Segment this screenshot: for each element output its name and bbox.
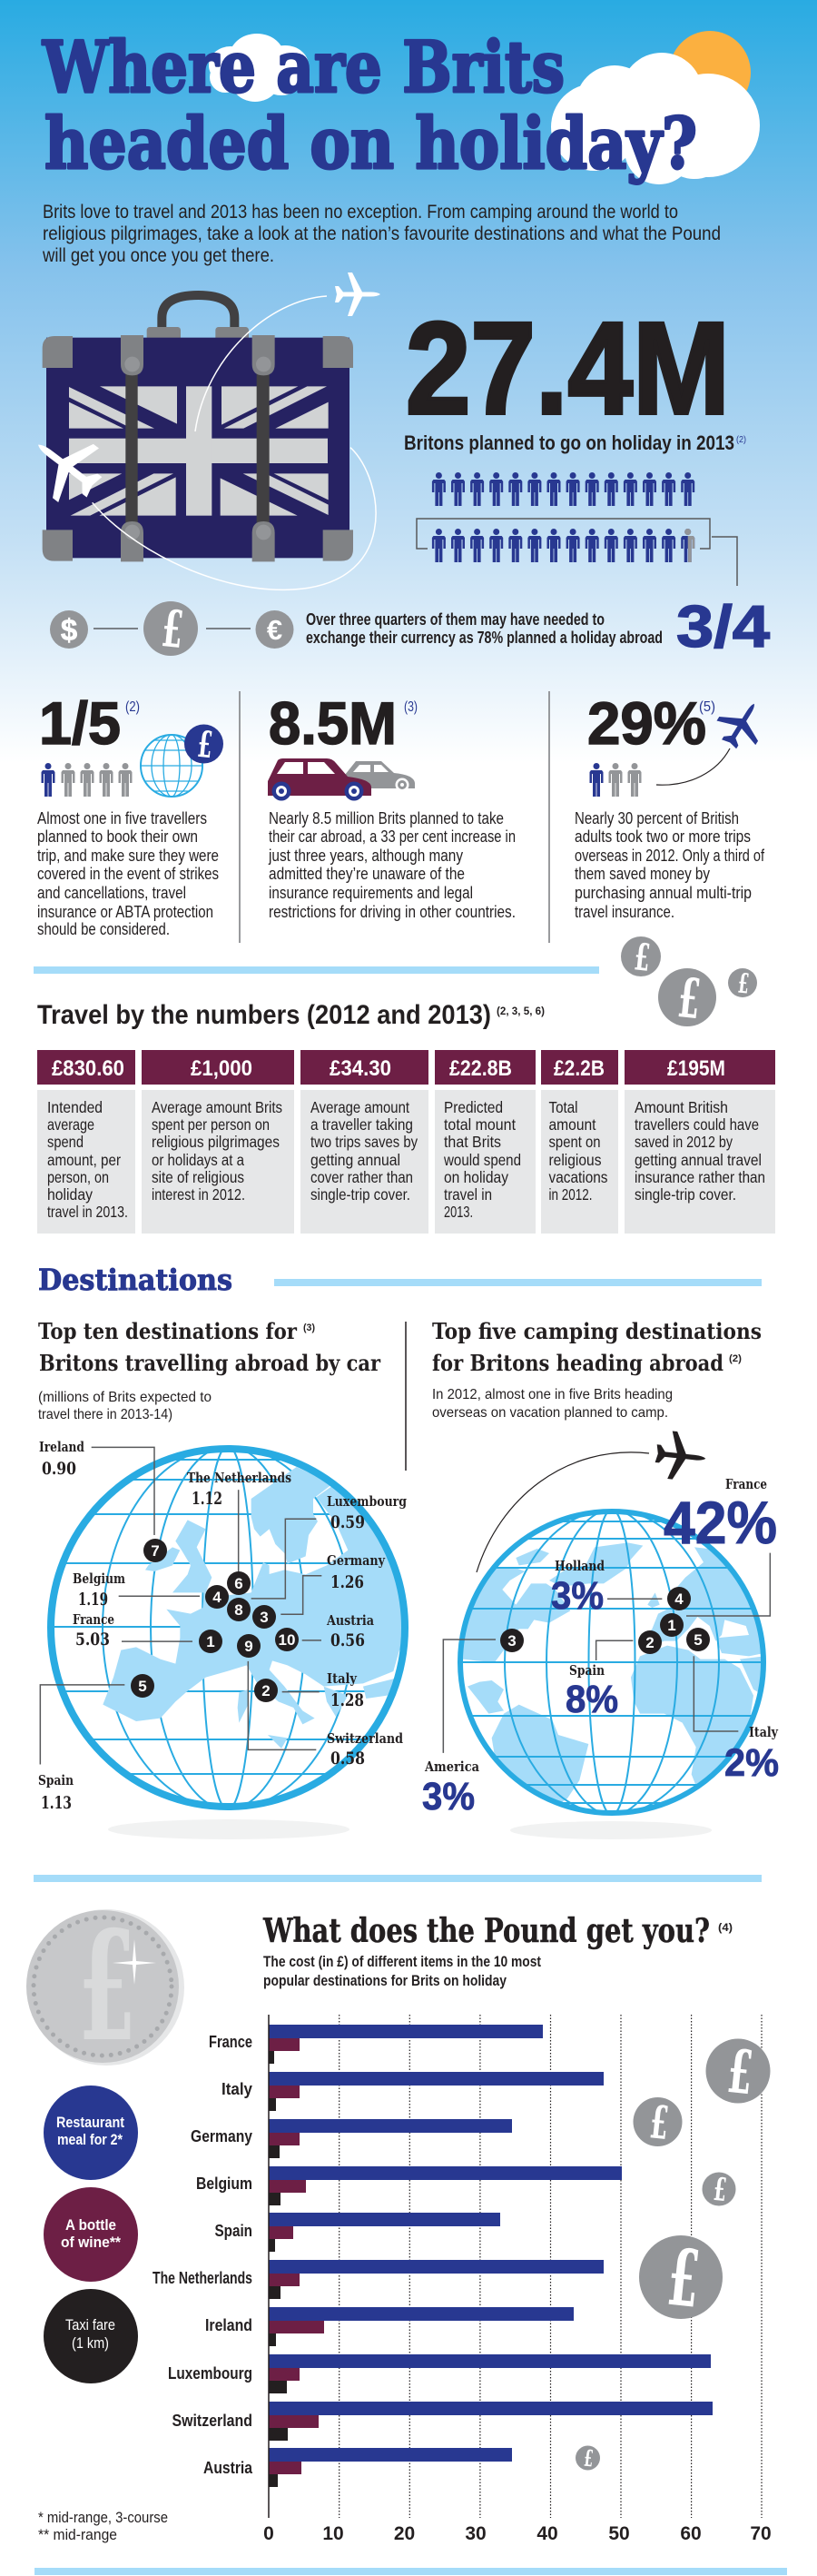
section rule xyxy=(34,966,599,974)
map leader lines xyxy=(40,1447,321,1764)
icons: pound coins on chart: £ xyxy=(583,2445,595,2472)
map: europe globe xyxy=(45,1446,408,1809)
camping labels: Spain xyxy=(569,1662,605,1679)
map labels: top ten: 5.03 xyxy=(75,1630,110,1650)
axis tick labels: 0 xyxy=(263,2523,274,2544)
column: 2.2B: in 2012. xyxy=(548,1185,592,1204)
flight path curves xyxy=(93,296,376,590)
union jack flag xyxy=(69,386,329,516)
map labels: top ten: Spain xyxy=(38,1772,74,1788)
icons: pound coins xyxy=(621,935,757,1032)
black bars: taxi xyxy=(269,2051,288,2487)
column: 1,000: religious pilgrimages xyxy=(152,1133,280,1151)
map markers: ranked countries: 8 xyxy=(234,1601,243,1619)
legend: taxi fare: Taxi fare xyxy=(65,2316,115,2333)
map labels: top ten: 1.13 xyxy=(41,1793,72,1813)
curved arrow xyxy=(656,748,730,785)
map: world globe xyxy=(454,1510,772,1815)
icon: white plane top xyxy=(335,272,380,316)
text block: planned to book their own xyxy=(37,827,198,846)
text block: adults took two or more trips xyxy=(575,827,751,846)
column: 195M xyxy=(625,1050,775,1234)
column: 22.8B: Predicted xyxy=(444,1098,503,1116)
column: 34.30: single-trip cover. xyxy=(310,1185,410,1204)
camping markers xyxy=(500,1587,710,1654)
column: 22.8B: would spend xyxy=(443,1151,521,1169)
table: travel numbers xyxy=(37,1050,775,1234)
footnotes: ** mid-range xyxy=(38,2526,117,2543)
map markers: ranked countries: 7 xyxy=(151,1542,160,1560)
camping labels: Italy xyxy=(749,1724,779,1740)
map markers: ranked countries: 4 xyxy=(212,1589,221,1606)
pictogram: people row two xyxy=(432,529,694,562)
heading: top ten destinations: Britons travelling abroad by car xyxy=(39,1350,380,1376)
map labels: top ten: 0.90 xyxy=(42,1459,76,1479)
text block: their car abroad, a 33 per cent increase in xyxy=(269,827,516,846)
currency icons: $ xyxy=(61,613,77,647)
heading: top five camping: for Britons heading abroad xyxy=(432,1350,723,1376)
camping labels: America xyxy=(424,1759,479,1775)
camping markers: 3 xyxy=(507,1632,517,1650)
map markers: ranked countries: 3 xyxy=(260,1609,269,1626)
column: 22.8B: 2013. xyxy=(444,1203,473,1221)
column: 2.2B xyxy=(541,1050,618,1234)
icon: black plane xyxy=(654,1430,708,1482)
map labels: top ten: Germany xyxy=(327,1552,386,1569)
title: headed on holiday? xyxy=(44,103,697,185)
country labels: Germany xyxy=(191,2126,253,2145)
text block: insurance requirements and legal xyxy=(269,884,473,902)
column: 195M: getting annual travel xyxy=(635,1151,762,1169)
axis tick labels: 60 xyxy=(680,2523,702,2544)
text block: admitted they’re unaware of the xyxy=(269,865,465,883)
icon: blue plane xyxy=(710,691,773,757)
title: Where are Brits xyxy=(42,26,565,109)
column: 1,000: site of religious xyxy=(152,1168,244,1186)
map markers: ranked countries: 9 xyxy=(244,1638,253,1655)
icons: pound coins on chart: £ xyxy=(724,2036,756,2108)
icon: large cloud xyxy=(551,53,760,184)
column: 1,000: Average amount Brits xyxy=(152,1098,282,1116)
footnotes xyxy=(38,2509,168,2543)
map markers: ranked countries xyxy=(131,1539,299,1702)
column: 34.30: Average amount xyxy=(310,1098,409,1116)
currency icons xyxy=(50,599,294,660)
column: 22.8B: that Brits xyxy=(444,1133,501,1151)
subheading: top ten: (millions of Brits expected to xyxy=(38,1390,212,1405)
subheading: camping xyxy=(432,1387,673,1421)
camping labels: Holland xyxy=(555,1558,605,1574)
maroon bars: wine xyxy=(269,2038,324,2474)
column: 34.30: £34.30 xyxy=(330,1056,391,1081)
column: 830.60: person, on xyxy=(47,1168,109,1186)
legend: taxi fare: (1 km) xyxy=(72,2334,109,2352)
legend: restaurant meal: meal for 2* xyxy=(57,2131,123,2148)
vertical divider xyxy=(405,1322,407,1471)
camping markers: 1 xyxy=(667,1617,676,1634)
section rule xyxy=(34,1875,762,1882)
currency text: Over three quarters of them may have needed to xyxy=(306,610,605,629)
column: 195M: Amount British xyxy=(635,1098,728,1116)
sky gradient background xyxy=(0,0,817,763)
currency icons: £ xyxy=(159,599,186,660)
text block: just three years, although many xyxy=(268,847,463,865)
subheading: pound chart: The cost (in £) of different items in the 10 most xyxy=(263,1953,541,1970)
map labels: top ten: 1.12 xyxy=(192,1489,222,1509)
stat: 3/4: 3/4 xyxy=(676,593,770,659)
heading: travel by the numbers: (2, 3, 5, 6) xyxy=(497,1005,545,1017)
title xyxy=(42,26,697,185)
currency text: exchange their currency as 78% planned a holiday abroad xyxy=(306,629,663,647)
text block xyxy=(575,809,765,921)
column: 22.8B: on holiday xyxy=(444,1168,508,1186)
column: 1,000: interest in 2012. xyxy=(152,1185,245,1204)
axis tick labels xyxy=(263,2523,772,2544)
icon: silver pound coin xyxy=(26,1898,184,2076)
column: 195M: £195M xyxy=(667,1056,725,1081)
column: 2.2B: amount xyxy=(548,1115,596,1134)
column: 830.60: £830.60 xyxy=(52,1056,124,1081)
column: 830.60: amount, per xyxy=(47,1151,121,1169)
map markers: ranked countries: 5 xyxy=(138,1678,147,1695)
text block: restrictions for driving in other countries. xyxy=(269,903,516,921)
column: 830.60: holiday xyxy=(47,1185,93,1204)
map labels: top ten: Italy xyxy=(327,1670,358,1687)
text block: them saved money by xyxy=(575,865,710,883)
icons: pound coins: £ xyxy=(736,968,751,1001)
country labels: France xyxy=(209,2032,252,2051)
pictogram: people row one xyxy=(432,472,694,506)
suitcase straps xyxy=(121,335,275,561)
subheading: camping: In 2012, almost one in five Brits heading xyxy=(432,1387,673,1402)
column: 195M: single-trip cover. xyxy=(635,1185,736,1204)
intro text xyxy=(42,202,721,266)
legend: bottle of wine xyxy=(44,2187,138,2282)
panel: multi-trip: (5) xyxy=(699,699,715,715)
suitcase corners xyxy=(43,336,353,561)
column: 2.2B: £2.2B xyxy=(554,1056,605,1081)
icon: white plane left xyxy=(18,418,114,514)
column: 195M: saved in 2012 by xyxy=(635,1133,733,1151)
icon: sun xyxy=(669,31,751,114)
heading: top five camping: Top five camping destinations xyxy=(432,1318,762,1344)
big stat: 27.4M: 27.4M xyxy=(406,295,730,441)
axis tick labels: 10 xyxy=(322,2523,344,2544)
heading: top five camping xyxy=(432,1318,762,1376)
panel: one in five xyxy=(37,689,223,938)
subheading: top ten xyxy=(38,1390,212,1422)
text block: overseas in 2012. Only a third of xyxy=(575,847,765,865)
column: 1,000: spent per person on xyxy=(152,1115,270,1134)
country labels: Spain xyxy=(214,2221,252,2240)
column: 34.30: cover rather than xyxy=(310,1168,413,1186)
camping leader lines xyxy=(443,1553,770,1753)
axis tick labels: 40 xyxy=(536,2523,558,2544)
map labels: top ten: 0.56 xyxy=(330,1630,365,1650)
column: 22.8B: total mount xyxy=(444,1115,516,1134)
column: 34.30 xyxy=(300,1050,428,1234)
country labels: Luxembourg xyxy=(168,2363,252,2383)
section rule xyxy=(34,2568,787,2575)
subheading: pound chart: popular destinations for Brits on holiday xyxy=(263,1972,507,1989)
intro text: religious pilgrimages, take a look at the nation’s favourite destinations and what the Pound xyxy=(43,223,721,244)
icon: union jack suitcase xyxy=(43,295,376,590)
bar chart: cost per country xyxy=(153,2015,772,2544)
column: 2.2B: spent on xyxy=(548,1133,601,1151)
suitcase handle xyxy=(162,295,234,329)
globe shadow xyxy=(108,1819,349,1839)
text block xyxy=(268,809,516,921)
country labels: Belgium xyxy=(196,2174,252,2193)
country labels: Austria xyxy=(203,2458,253,2477)
map labels: top ten: Switzerland xyxy=(327,1730,403,1747)
subheading: camping: overseas on vacation planned to camp. xyxy=(432,1405,668,1421)
heading: top ten destinations: (3) xyxy=(303,1323,315,1333)
camping labels: 2% xyxy=(724,1741,779,1785)
map labels: top ten: Belgium xyxy=(73,1570,125,1587)
stat caption: Britons planned to go on holiday in 2013 xyxy=(404,431,734,454)
map markers: ranked countries: 10 xyxy=(279,1631,295,1649)
bracket connector to 3/4 xyxy=(417,519,737,586)
text block: covered in the event of strikes xyxy=(37,865,219,883)
text block: purchasing annual multi-trip xyxy=(575,884,752,902)
flight arc xyxy=(477,1452,649,1572)
heading: what does the pound get you: What does the Pound get you? xyxy=(262,1912,710,1950)
panel: car travel xyxy=(268,689,516,921)
text block: insurance or ABTA protection xyxy=(37,903,213,921)
country labels: The Netherlands xyxy=(153,2268,252,2287)
column: 830.60: average xyxy=(47,1115,94,1134)
camping labels: 42% xyxy=(664,1489,777,1556)
column: 22.8B: travel in xyxy=(444,1185,492,1204)
axis tick labels: 70 xyxy=(750,2523,772,2544)
suitcase feet xyxy=(147,327,249,341)
intro text: Brits love to travel and 2013 has been no exception. From camping around the world to xyxy=(43,202,678,223)
legend: bottle of wine: A bottle xyxy=(65,2216,116,2234)
map markers: ranked countries: 6 xyxy=(234,1575,243,1592)
column: 34.30: getting annual xyxy=(310,1151,400,1169)
column: 34.30: a traveller taking xyxy=(310,1115,413,1134)
camping labels: 3% xyxy=(422,1775,475,1818)
axis tick labels: 20 xyxy=(394,2523,415,2544)
map labels: top ten: Austria xyxy=(326,1612,374,1629)
stat: 8.5M: 8.5M xyxy=(269,689,397,757)
camping markers: 2 xyxy=(645,1634,655,1651)
heading: destinations: Destinations xyxy=(38,1263,232,1297)
section rule xyxy=(274,1279,762,1286)
camping labels: 3% xyxy=(551,1574,604,1618)
text block xyxy=(37,809,219,938)
people pictogram xyxy=(590,763,641,797)
axis tick labels: 30 xyxy=(465,2523,487,2544)
text block: trip, and make sure they were xyxy=(37,847,219,865)
subheading: top ten: travel there in 2013-14) xyxy=(38,1407,172,1422)
country labels: Switzerland xyxy=(172,2411,252,2430)
column: 1,000: or holidays at a xyxy=(152,1151,244,1169)
heading: travel by the numbers: Travel by the numbers (2012 and 2013) xyxy=(37,1000,491,1030)
icon: globe with pound: £ xyxy=(195,723,214,767)
column: 195M: insurance rather than xyxy=(635,1168,765,1186)
column: 2.2B: vacations xyxy=(548,1168,608,1186)
panel: multi-trip xyxy=(575,689,773,921)
heading: top five camping: (2) xyxy=(729,1353,742,1364)
icons: pound coins on chart: £ xyxy=(664,2232,704,2326)
map labels: top ten xyxy=(38,1439,407,1813)
map labels: top ten: 1.19 xyxy=(78,1590,108,1610)
column: 830.60: travel in 2013. xyxy=(47,1203,128,1221)
icon: small cloud xyxy=(209,34,309,102)
map labels: top ten: The Netherlands xyxy=(187,1470,291,1486)
map markers: ranked countries: 1 xyxy=(206,1633,215,1650)
suitcase body xyxy=(46,338,349,558)
camping labels: France xyxy=(725,1476,767,1492)
camping labels xyxy=(422,1476,779,1818)
map labels: top ten: 1.28 xyxy=(330,1690,364,1710)
gridlines xyxy=(340,2015,762,2518)
text block: and cancellations, travel xyxy=(37,884,186,902)
column divider xyxy=(240,691,549,943)
country labels: Ireland xyxy=(205,2315,252,2334)
column: 830.60: Intended xyxy=(47,1098,103,1116)
camping labels: 8% xyxy=(566,1678,618,1721)
axis line xyxy=(268,2015,270,2518)
map labels: top ten: France xyxy=(73,1611,114,1628)
country labels xyxy=(153,2032,253,2477)
map labels: top ten: 1.26 xyxy=(330,1572,364,1592)
icons: pound coins: £ xyxy=(633,935,652,980)
subheading: pound chart xyxy=(263,1953,541,1989)
footnotes: * mid-range, 3-course xyxy=(38,2509,168,2526)
column: 2.2B: religious xyxy=(548,1151,602,1169)
map labels: top ten: 0.58 xyxy=(330,1749,365,1769)
intro text: will get you once you get there. xyxy=(42,245,274,266)
map markers: ranked countries: 2 xyxy=(261,1682,271,1699)
camping markers: 5 xyxy=(694,1631,703,1649)
text block: Nearly 8.5 million Brits planned to take xyxy=(269,809,504,827)
column: 830.60 xyxy=(37,1050,135,1234)
axis tick labels: 50 xyxy=(608,2523,630,2544)
heading: what does the pound get you: (4) xyxy=(718,1921,733,1934)
panel: car travel: (3) xyxy=(404,699,418,715)
text block: Almost one in five travellers xyxy=(37,809,207,827)
stat: 29%: 29% xyxy=(587,689,706,757)
text block: Nearly 30 percent of British xyxy=(575,809,739,827)
text block: travel insurance. xyxy=(575,903,674,921)
heading: top ten destinations: Top ten destinations for xyxy=(38,1318,297,1344)
people pictogram xyxy=(42,763,133,797)
column: 2.2B: Total xyxy=(548,1098,577,1116)
legend: restaurant meal: Restaurant xyxy=(56,2114,124,2131)
camping markers: 4 xyxy=(674,1590,684,1608)
icons: pound coins on chart: £ xyxy=(647,2095,671,2150)
icons: pound coins: £ xyxy=(674,966,704,1032)
legend: taxi fare xyxy=(44,2289,138,2383)
map labels: top ten: 0.59 xyxy=(330,1512,365,1532)
map labels: top ten: Ireland xyxy=(39,1439,84,1455)
icons: pound coins on chart: £ xyxy=(712,2171,728,2209)
currency icons: € xyxy=(267,614,282,646)
blue bars: restaurant meal xyxy=(269,2025,713,2462)
icon: silver pound coin: £ xyxy=(78,1898,136,2076)
icon: cars xyxy=(268,758,415,801)
icons: pound coins on chart xyxy=(576,2036,770,2472)
globe shadow xyxy=(510,1821,712,1839)
currency text xyxy=(306,610,663,647)
icon: globe with pound xyxy=(141,723,223,797)
column: 830.60: spend xyxy=(47,1133,84,1151)
legend: bottle of wine: of wine** xyxy=(61,2234,121,2251)
heading: top ten destinations xyxy=(38,1318,380,1376)
column: 195M: travellers could have xyxy=(635,1115,759,1134)
column: 34.30: two trips saves by xyxy=(310,1133,418,1151)
text block: should be considered. xyxy=(37,920,170,938)
legend: restaurant meal xyxy=(44,2086,138,2180)
country labels: Italy xyxy=(221,2079,253,2098)
column: 22.8B xyxy=(435,1050,536,1234)
panel: one in five: (2) xyxy=(125,699,140,715)
column: 22.8B: £22.8B xyxy=(449,1056,512,1081)
column: 1,000: £1,000 xyxy=(191,1056,252,1081)
stat caption: (2) xyxy=(736,435,746,445)
map labels: top ten: Luxembourg xyxy=(327,1493,407,1510)
stat: 1/5: 1/5 xyxy=(39,689,121,757)
column: 1,000 xyxy=(142,1050,294,1234)
